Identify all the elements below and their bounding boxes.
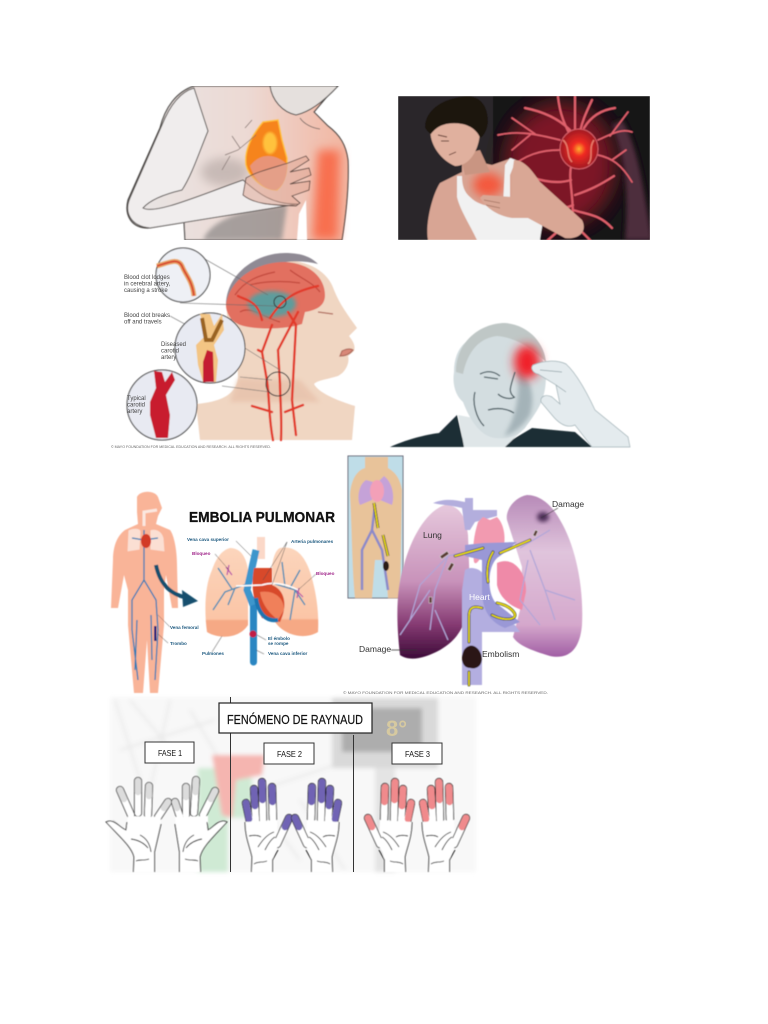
phase dividers	[230, 697, 354, 872]
heart	[253, 568, 284, 622]
left lung	[397, 505, 470, 659]
neck	[460, 150, 490, 175]
finger creases	[540, 370, 566, 392]
chest shadow	[201, 158, 249, 186]
stroke labels: Diseased	[161, 342, 186, 348]
hands phase 1	[106, 780, 227, 872]
small lungs	[127, 528, 165, 552]
embolia labels: Bloqueo	[316, 571, 335, 576]
diseased carotid	[196, 314, 224, 382]
right arm and hand	[480, 160, 584, 238]
embolia labels: Vena cava superior	[187, 537, 229, 542]
eye and lips	[318, 312, 353, 356]
neck and chin	[270, 86, 338, 115]
brow and mouth	[438, 135, 456, 155]
phase 2 label	[264, 743, 314, 764]
body silhouette	[127, 86, 348, 240]
anatomy labels: Damage	[359, 644, 391, 654]
phase 1 label: FASE 1	[158, 749, 182, 758]
neck shading	[230, 378, 320, 402]
lung branches	[400, 530, 575, 640]
embolia labels: Pulmones	[202, 651, 224, 656]
right lung	[507, 495, 582, 657]
phase 1 label	[145, 742, 194, 763]
panel: fenomeno de raynaud	[106, 697, 476, 872]
panel: pulmonary embolism anatomy	[343, 456, 584, 695]
magnifier circle top	[156, 248, 210, 302]
stroke copyright: © MAYO FOUNDATION FOR MEDICAL EDUCATION AND RESEARCH. ALL RIGHTS RESERVED.	[111, 445, 271, 449]
gap between torso and arm	[297, 200, 307, 240]
stroke labels: causing a stroke	[124, 288, 168, 294]
heart	[246, 120, 287, 190]
woman's left arm and chest	[427, 158, 520, 240]
panel: stroke and carotid artery diagram	[111, 248, 357, 449]
face shadow	[504, 368, 532, 436]
stroke area	[248, 291, 296, 317]
magnifier circle bottom	[127, 370, 197, 440]
hands phase 3	[368, 782, 466, 872]
hands phase 2	[245, 782, 339, 872]
arm pain glow	[312, 150, 340, 240]
stroke labels: Blood clot breaks	[124, 313, 170, 319]
raynaud title box: FENÓMENO DE RAYNAUD	[227, 712, 363, 727]
panel: embolia pulmonar diagram	[111, 492, 335, 693]
upper heart	[473, 517, 505, 563]
dark shirt	[390, 415, 592, 447]
embolism	[462, 646, 482, 668]
brain	[226, 262, 325, 328]
faded sketch background	[110, 697, 476, 872]
embolus	[250, 630, 256, 638]
leader lines	[158, 541, 316, 654]
hair	[425, 96, 488, 138]
artery to lungs	[236, 583, 298, 590]
clot in leg	[154, 626, 156, 641]
phase 3 label	[392, 743, 442, 764]
hair	[226, 253, 318, 322]
curved arrow	[156, 565, 190, 598]
windpipe and top vessels	[433, 498, 497, 530]
dark background	[398, 96, 650, 240]
embolia title: EMBOLIA PULMONAR	[189, 509, 335, 526]
anatomy labels: Damage	[552, 499, 584, 509]
anatomy labels: Heart	[469, 592, 490, 602]
face	[453, 332, 546, 438]
red pain glow	[514, 345, 540, 379]
phase 3 label: FASE 3	[405, 750, 431, 759]
chest vessels	[222, 120, 256, 170]
pulmonary branches	[213, 562, 305, 620]
anatomy copyright: © MAYO FOUNDATION FOR MEDICAL EDUCATION AND RESEARCH. ALL RIGHTS RESERVED.	[343, 691, 548, 695]
sign characters: 8°	[386, 716, 407, 741]
magnifier circle middle	[175, 313, 245, 383]
head and shoulders	[196, 260, 357, 440]
white tank top	[457, 158, 545, 240]
anatomy labels	[359, 499, 584, 659]
arteries	[498, 97, 632, 240]
stroke labels: Blood clot lodges	[124, 275, 170, 281]
airway	[144, 510, 157, 526]
raynaud title box	[219, 703, 372, 733]
main lungs and heart	[391, 495, 582, 685]
leader lines	[170, 258, 280, 392]
clotted cerebral artery	[157, 261, 194, 296]
embolia labels: Arteria pulmonares	[291, 539, 334, 544]
abdomen organs	[203, 205, 287, 240]
leader lines	[391, 508, 558, 650]
stroke labels: carotid	[127, 402, 145, 408]
lower heart	[497, 561, 526, 610]
hand and forearm on temple	[532, 361, 630, 447]
brain folds	[235, 270, 320, 322]
vena cava	[462, 568, 520, 685]
stroke labels: carotid	[161, 348, 179, 354]
chest pain glow	[473, 173, 503, 197]
stroke labels: off and travels	[124, 320, 162, 326]
anatomy labels: Embolism	[482, 649, 519, 659]
body figure	[111, 492, 178, 693]
stroke labels	[124, 275, 186, 415]
embolia labels: Vena femoral	[170, 625, 199, 630]
small target circles	[266, 296, 290, 396]
stroke labels: in cerebral artery,	[124, 282, 171, 288]
stroke labels: artery	[161, 355, 176, 361]
embolia labels: Vena cava inferior	[268, 651, 308, 656]
small heart	[141, 534, 151, 548]
neck	[458, 415, 525, 447]
typical carotid	[150, 371, 175, 438]
face	[431, 120, 480, 166]
panel: woman with chest pain and heart overlay	[398, 96, 652, 240]
large left lung	[205, 548, 248, 637]
hair	[456, 323, 546, 374]
large right lung	[272, 547, 318, 636]
hand on chest	[243, 156, 311, 206]
clot fragments	[429, 530, 538, 603]
damage patch right lung	[537, 512, 549, 522]
trachea	[257, 537, 265, 559]
panel: older man with headache	[390, 323, 630, 447]
raised arm	[128, 88, 298, 228]
blockage marks	[226, 565, 303, 598]
glowing heart	[560, 129, 598, 169]
vena cava	[250, 600, 257, 662]
inset body view	[348, 456, 403, 598]
panel: heart attack torso illustration	[127, 86, 348, 240]
hand creases	[484, 200, 500, 208]
pulmonary artery band	[465, 542, 520, 628]
stroke labels: artery	[127, 409, 142, 415]
embolia labels	[170, 537, 335, 656]
embolia labels: Bloqueo	[192, 551, 211, 556]
embolia labels: se rompe	[268, 641, 289, 646]
veins of body	[132, 530, 158, 680]
anatomy labels: Lung	[423, 530, 442, 540]
red torso overlay	[505, 103, 615, 227]
embolia labels: El émbolo	[268, 636, 290, 641]
yellow flow arrows	[455, 540, 530, 685]
phase 2 label: FASE 2	[277, 750, 303, 759]
embolia labels: Trombo	[170, 641, 187, 646]
arteries	[238, 286, 318, 440]
facial features	[474, 372, 515, 426]
stroke labels: Typical	[127, 396, 146, 402]
